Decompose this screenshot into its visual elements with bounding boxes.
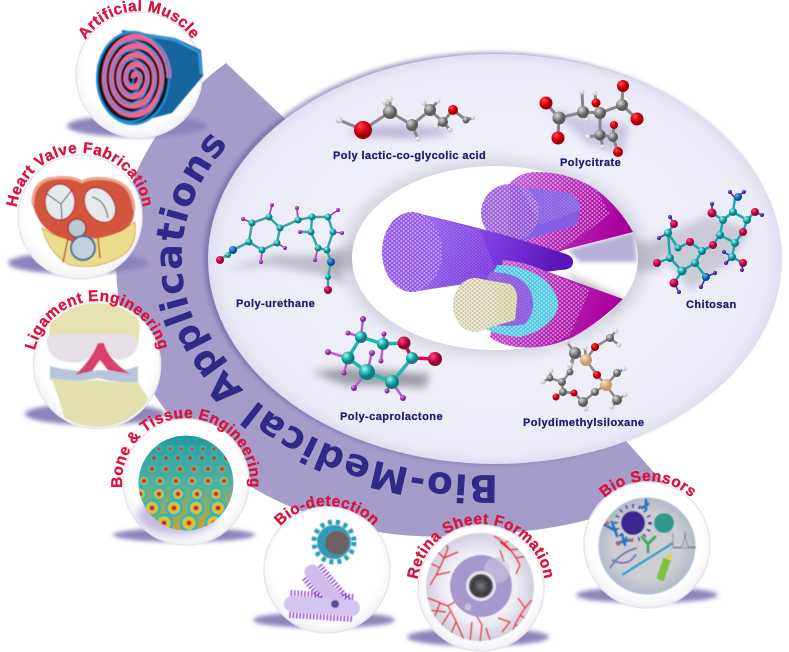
tube: cyan — [470, 265, 558, 337]
core background — [330, 160, 662, 356]
panel: bone and tissue engineering — [111, 408, 260, 546]
tube: lower magenta — [490, 260, 623, 348]
molecule: poly-caprolactone — [312, 316, 443, 423]
icon: bacteria — [290, 572, 354, 608]
molecule: polydimethylsiloxane — [523, 328, 644, 429]
panel: carbon nanotube core — [330, 160, 662, 356]
label: Heart Valve Fabrication — [6, 142, 151, 207]
tube: left purple — [382, 212, 573, 292]
molecule: polycitrate — [540, 80, 644, 169]
purple band — [116, 63, 667, 537]
icon: knee joint — [47, 303, 148, 430]
panel: polymer ellipse — [204, 52, 782, 464]
molecule: poly-urethane — [216, 203, 345, 310]
molecule: chitosan — [650, 190, 764, 311]
icon: rolled muscle fibre — [87, 28, 203, 137]
label: Retina Sheet Formation — [406, 514, 552, 579]
label: Polycitrate — [560, 157, 621, 169]
label: Poly-caprolactone — [340, 411, 443, 423]
icon: heart valves — [33, 178, 135, 266]
molecule: poly lactic-co-glycolic acid — [333, 96, 486, 162]
label: Bio-detection — [274, 496, 378, 526]
label: Polydimethylsiloxane — [523, 417, 644, 429]
icon: eye with blood vessels — [426, 533, 534, 642]
label: Poly lactic-co-glycolic acid — [333, 150, 486, 162]
panel: artificial muscle — [64, 0, 207, 140]
tube: upper magenta — [481, 172, 633, 256]
icon: tissue cells — [138, 436, 234, 530]
panel: ligament engineering — [22, 290, 168, 430]
label: Chitosan — [686, 299, 737, 311]
tube: inner yellow — [453, 278, 517, 332]
label: Bone & Tissue Engineering — [111, 408, 260, 487]
label: Bio Sensors — [598, 471, 695, 498]
panel: bio-detection — [251, 496, 397, 634]
panel: retina sheet formation — [405, 514, 552, 652]
label: Poly-urethane — [236, 298, 315, 310]
icon: biosensor disk — [599, 498, 696, 594]
icon: virus — [314, 522, 354, 562]
label: Ligament Engineering — [24, 290, 168, 350]
heading: Bio-Medical Applications: Bio-Medical Applications — [156, 134, 495, 504]
panel: bio sensors — [574, 471, 720, 609]
panel: heart valve fabrication — [6, 142, 151, 280]
